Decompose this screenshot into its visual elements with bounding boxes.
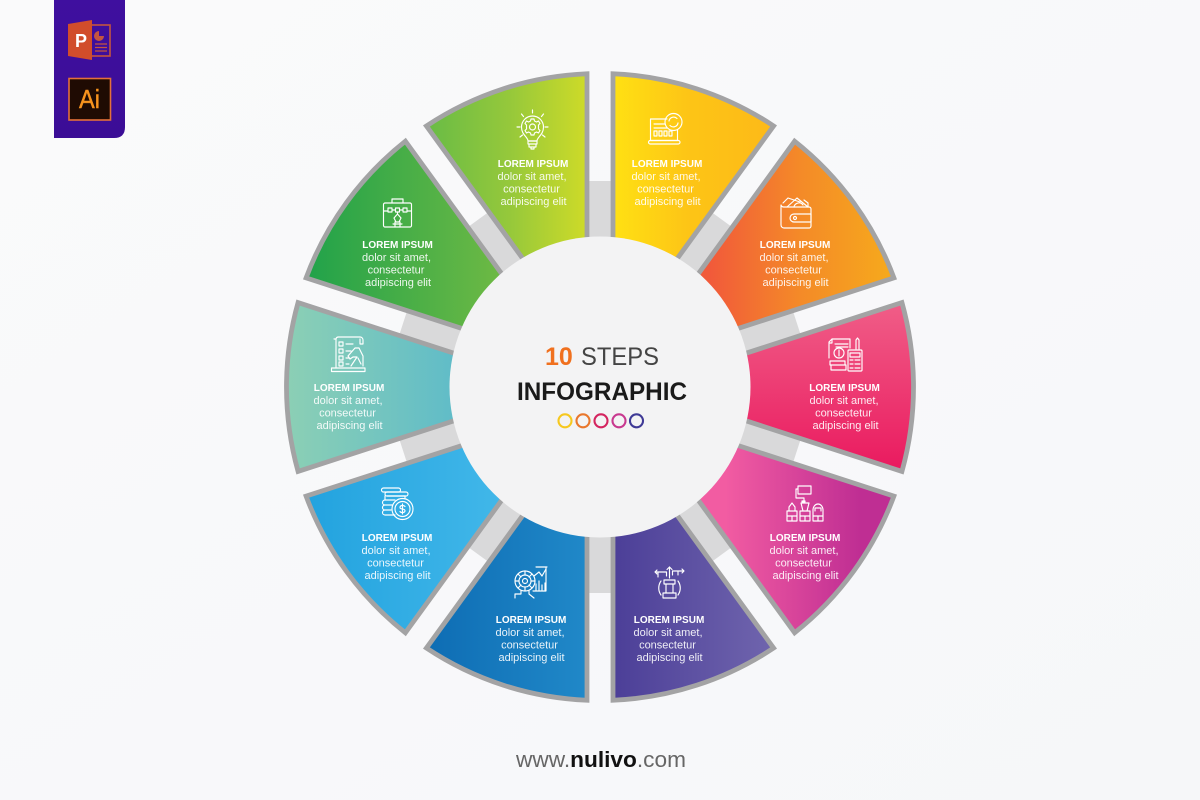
- text: step 1: dolor sit amet,: [631, 171, 701, 183]
- text: step 3: consectetur: [815, 408, 872, 420]
- icon: checklist scroll and knight: [332, 337, 365, 372]
- text: step 4: consectetur: [775, 558, 832, 570]
- icon: rook with arrows: [655, 567, 684, 598]
- text: step 2: consectetur: [765, 264, 822, 276]
- text: step 7: adipiscing elit: [364, 570, 431, 582]
- icon: wallet: [781, 198, 811, 228]
- text: step 9: adipiscing elit: [365, 277, 431, 289]
- text: step 5: adipiscing elit: [636, 652, 703, 664]
- segment 10: lime: [426, 74, 587, 298]
- icon: PowerPoint: P: [75, 31, 87, 51]
- icon: Illustrator: Ai: [79, 84, 100, 114]
- segment 4: magenta: [669, 430, 894, 633]
- text: step 3: adipiscing elit: [812, 420, 879, 432]
- text: step 8: consectetur: [319, 408, 376, 420]
- text: step 10: dolor sit amet,: [497, 171, 567, 183]
- icon: light bulb with gear: [517, 110, 548, 149]
- text: step 6: consectetur: [501, 640, 558, 652]
- text: step 8: LOREM IPSUM: [314, 383, 384, 394]
- text: step 9: consectetur: [368, 264, 425, 276]
- icon: documents and calculator: [829, 338, 862, 371]
- icon: gear and chart: [515, 567, 547, 598]
- text: step 4: adipiscing elit: [772, 570, 839, 582]
- text: step 4: LOREM IPSUM: [770, 533, 840, 544]
- segment 2: orange: [669, 141, 894, 344]
- badge panel: [54, 0, 125, 138]
- grey connectors between segments: [399, 181, 801, 593]
- icon: coin stack: [382, 488, 413, 520]
- text: step 1: LOREM IPSUM: [632, 159, 702, 170]
- segment 7: light blue: [306, 430, 531, 633]
- icon: briefcase with flow: [384, 199, 412, 227]
- segment 6: blue: [426, 476, 587, 700]
- center title: 10 steps: 10: [545, 343, 573, 371]
- text: step 10: LOREM IPSUM: [498, 159, 568, 170]
- text: step 9: LOREM IPSUM: [362, 240, 433, 251]
- text: step 2: adipiscing elit: [762, 277, 829, 289]
- segment 8: teal: [286, 303, 501, 471]
- center title: infographic: INFOGRAPHIC: [517, 378, 687, 406]
- segment 1: yellow: [613, 74, 774, 298]
- center title: 10 steps: STEPS: [581, 343, 659, 371]
- text: step 4: dolor sit amet,: [769, 545, 839, 557]
- text: step 10: adipiscing elit: [500, 196, 567, 208]
- center circle: [450, 236, 750, 538]
- text: step 6: adipiscing elit: [498, 652, 565, 664]
- segment 9: green: [306, 141, 531, 344]
- icon: laptop with refresh: [648, 114, 682, 144]
- text: step 1: adipiscing elit: [634, 196, 701, 208]
- text: step 6: LOREM IPSUM: [496, 615, 566, 626]
- text: step 7: consectetur: [367, 558, 424, 570]
- segment 5: purple: [613, 476, 774, 700]
- five coloured rings: [558, 414, 643, 427]
- text: step 10: consectetur: [503, 184, 560, 196]
- text: step 9: dolor sit amet,: [362, 252, 431, 264]
- segment 3: pink: [699, 303, 914, 471]
- text: step 3: LOREM IPSUM: [809, 383, 880, 394]
- text: step 7: LOREM IPSUM: [362, 533, 432, 544]
- icon: paint roller and figures: [787, 486, 823, 521]
- text: step 5: LOREM IPSUM: [634, 615, 704, 626]
- badge: software icons: [54, 0, 125, 138]
- text: step 5: dolor sit amet,: [633, 627, 703, 639]
- text: step 8: adipiscing elit: [316, 420, 383, 432]
- text: step 2: LOREM IPSUM: [760, 240, 830, 251]
- footer website: www.nulivo.com: [515, 747, 686, 772]
- text: step 5: consectetur: [639, 640, 696, 652]
- text: step 2: dolor sit amet,: [759, 252, 829, 264]
- text: step 8: dolor sit amet,: [313, 395, 383, 407]
- text: step 3: dolor sit amet,: [809, 395, 879, 407]
- text: step 1: consectetur: [637, 184, 694, 196]
- text: step 6: dolor sit amet,: [495, 627, 565, 639]
- text: step 7: dolor sit amet,: [361, 545, 431, 557]
